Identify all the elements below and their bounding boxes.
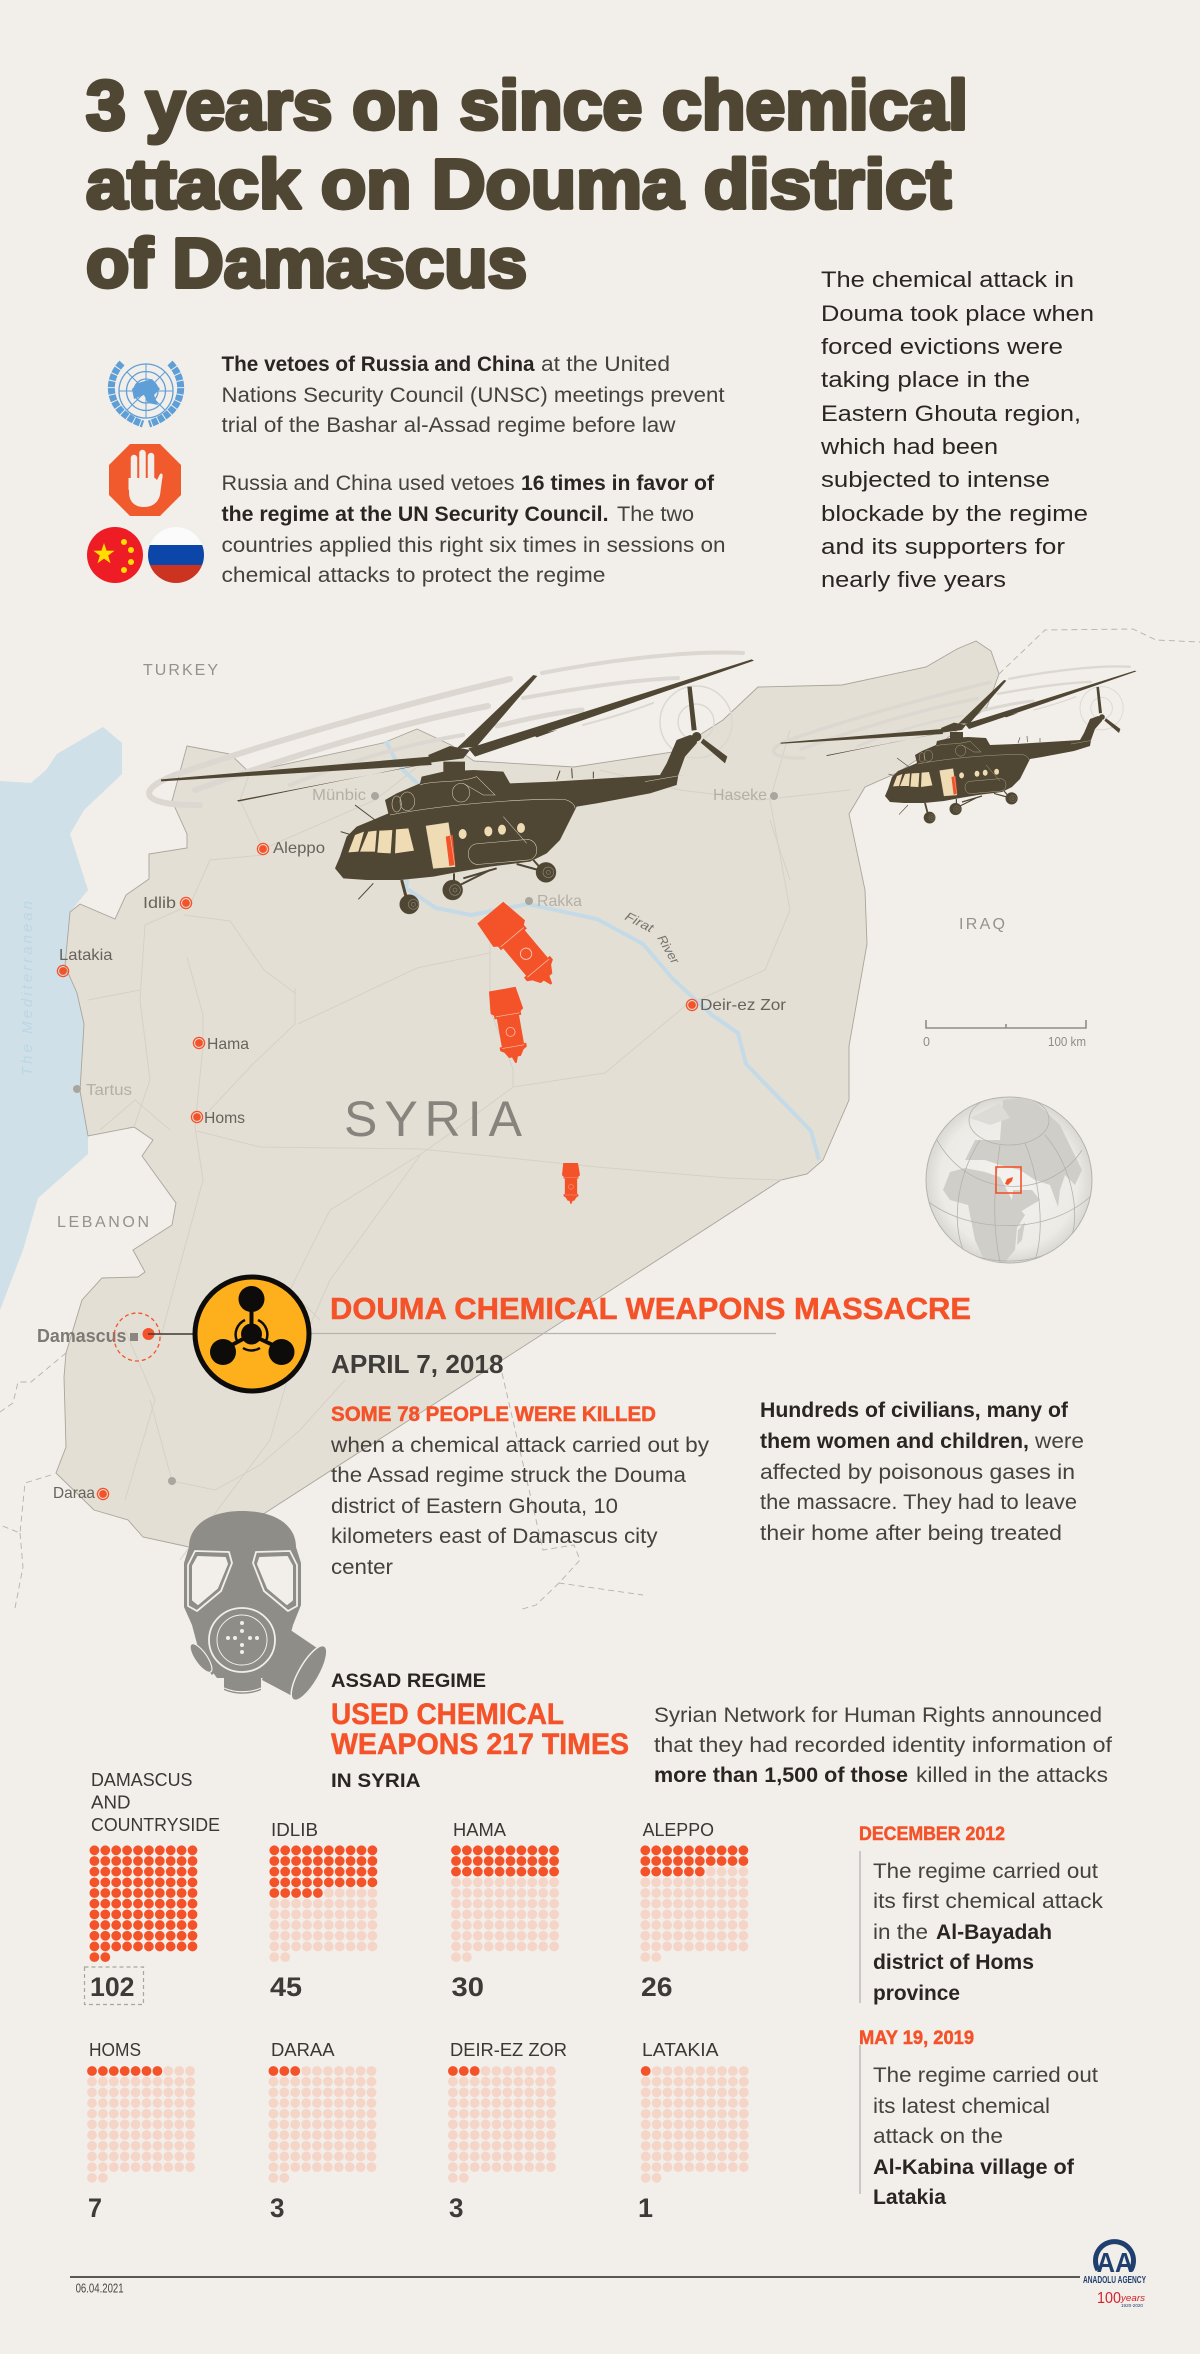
dot chart: Aleppo: ALEPPO: [643, 1819, 714, 1840]
city markers: Firat: [623, 909, 656, 936]
dot chart: Damascus and countryside: AND: [91, 1792, 130, 1812]
text block: civilians affected: them women and children,: [760, 1429, 1029, 1453]
dot chart: Deir-ez Zor: [449, 2039, 567, 2223]
title: [86, 66, 968, 302]
labels: neighbouring countries: TURKEY: [143, 662, 218, 679]
city markers: River: [654, 932, 682, 967]
logo: Anadolu Agency: 100: [1097, 2290, 1121, 2307]
text block: civilians affected: [760, 1398, 1084, 1545]
text block: veto counts: Russia and China used vetoes: [222, 472, 514, 495]
dot chart: Idlib: 45: [270, 1972, 302, 2002]
timeline: December 2012: in the: [873, 1921, 928, 1944]
text block: vetoes of Russia and China: at the United: [541, 353, 670, 376]
text block: Syrian Network for Human Rights: [654, 1704, 1112, 1787]
title: 3 years on since chemical: [86, 66, 968, 144]
text block: civilians affected: were: [1034, 1430, 1084, 1453]
text block: civilians affected: Hundreds of civilians, many of: [760, 1398, 1069, 1422]
icon: gas mask: [184, 1511, 333, 1705]
heading: Assad regime used chemical weapons 217 times: ASSAD REGIME: [331, 1671, 486, 1692]
text block: people killed: district of Eastern Ghouta, 10: [331, 1495, 618, 1518]
logo: Anadolu Agency: AA: [1096, 2247, 1134, 2278]
text block: civilians affected: affected by poisonous gases in: [760, 1461, 1075, 1484]
text block: veto counts: countries applied this right six times in sessions on: [222, 534, 726, 557]
icon: Russia flag: [148, 527, 204, 583]
divider under heading: [311, 1332, 776, 1334]
timeline: May 19, 2019: MAY 19, 2019: [859, 2028, 974, 2049]
text block: people killed: [330, 1403, 710, 1579]
dot chart: Damascus and countryside: DAMASCUS: [91, 1769, 192, 1790]
timeline: May 19, 2019: attack on the: [873, 2125, 1003, 2148]
city markers: Aleppo: [273, 840, 325, 857]
city markers: Homs: [204, 1110, 245, 1127]
Damascus marker: [37, 1313, 195, 1361]
date: April 7, 2018: APRIL 7, 2018: [331, 1349, 504, 1379]
text block: Syrian Network for Human Rights: that they had recorded identity information of: [654, 1734, 1112, 1757]
logo: Anadolu Agency: ANADOLU AGENCY: [1083, 2275, 1146, 2286]
text block: veto counts: 16 times in favor of: [521, 471, 715, 495]
labels: neighbouring countries: [19, 662, 1005, 1231]
dot chart: Daraa: [270, 2039, 372, 2223]
text block: veto counts: chemical attacks to protect the regime: [222, 564, 606, 587]
timeline: December 2012: province: [873, 1981, 960, 2005]
text block: vetoes of Russia and China: Nations Security Council (UNSC) meetings prevent: [222, 384, 725, 407]
river: Euphrates: [386, 741, 819, 1160]
timeline: May 19, 2019: Al-Kabina village of: [873, 2155, 1075, 2179]
dot chart: Damascus and countryside: COUNTRYSIDE: [91, 1814, 220, 1835]
city markers: Haseke: [713, 787, 767, 804]
dot chart: Latakia: [638, 2039, 744, 2223]
dot chart: Damascus and countryside: [84, 1769, 220, 2004]
text block: Syrian Network for Human Rights: more than 1,500 of those: [654, 1763, 908, 1787]
dot chart: Idlib: [270, 1819, 372, 2002]
text block: people killed: the Assad regime struck the Douma: [331, 1464, 686, 1487]
bomb: medium: [487, 986, 532, 1066]
scale bar: 0: [923, 1035, 930, 1049]
text block: Douma context: The chemical attack in: [821, 267, 1074, 292]
timeline: May 19, 2019: The regime carried out: [873, 2064, 1098, 2087]
text block: Douma context: subjected to intense: [821, 467, 1050, 492]
text block: Douma context: blockade by the regime: [821, 501, 1088, 526]
icon: United Nations emblem: [111, 363, 181, 424]
city markers: Tartus: [86, 1082, 132, 1099]
dot chart: Daraa: 3: [270, 2193, 284, 2223]
heading: Assad regime used chemical weapons 217 times: IN SYRIA: [331, 1771, 421, 1792]
dot chart: Deir-ez Zor: 3: [449, 2193, 464, 2223]
dot chart: Aleppo: [641, 1819, 744, 2002]
dot chart: Aleppo: 26: [641, 1972, 672, 2002]
dot chart: Idlib: IDLIB: [271, 1819, 318, 1840]
timeline: December 2012: [859, 1824, 1104, 2005]
timeline: December 2012: DECEMBER 2012: [859, 1824, 1005, 1845]
text block: people killed: kilometers east of Damascus city: [331, 1525, 658, 1548]
title: of Damascus: [86, 224, 527, 302]
city markers: Daraa: [53, 1485, 95, 1502]
text block: veto counts: the regime at the UN Security Council.: [222, 502, 608, 526]
roads: [88, 730, 850, 1560]
Damascus marker: Damascus: [37, 1326, 126, 1346]
logo: Anadolu Agency: 1920-2020: [1121, 2303, 1143, 2308]
labels: neighbouring countries: The Mediterranean: [19, 901, 36, 1076]
logo: Anadolu Agency: years: [1120, 2293, 1146, 2303]
timeline: May 19, 2019: [859, 2028, 1098, 2209]
heading: Assad regime used chemical weapons 217 times: WEAPONS 217 TIMES: [331, 1728, 629, 1761]
label: Syria: SYRIA: [344, 1091, 523, 1147]
dot chart: Homs: [88, 2039, 190, 2223]
icon: China flag: [87, 527, 143, 583]
text block: Douma context: forced evictions were: [821, 334, 1063, 359]
city markers: Hama: [207, 1036, 249, 1053]
dot chart: Homs: 7: [88, 2193, 102, 2223]
timeline: December 2012: district of Homs: [873, 1950, 1034, 1974]
text block: civilians affected: their home after being treated: [760, 1522, 1062, 1545]
map: Syria: [0, 629, 1200, 1610]
dot chart: Damascus and countryside: 102: [90, 1972, 134, 2002]
title: attack on Douma district: [86, 145, 951, 223]
dot chart: Hama: 30: [452, 1972, 484, 2002]
text block: Douma context: taking place in the: [821, 367, 1030, 392]
text block: vetoes of Russia and China: The vetoes of Russia and China: [222, 352, 535, 376]
sea: [0, 727, 122, 1310]
footer rule: [70, 2276, 1080, 2278]
city markers: Münbic: [312, 787, 366, 804]
heading: Assad regime used chemical weapons 217 times: [331, 1671, 629, 1792]
timeline: December 2012: Al-Bayadah: [936, 1920, 1052, 1944]
dot chart: Deir-ez Zor: DEIR-EZ ZOR: [450, 2039, 567, 2060]
text block: vetoes of Russia and China: [222, 352, 725, 437]
labels: neighbouring countries: IRAQ: [959, 916, 1005, 933]
date stamp: 06.04.2021: [76, 2282, 124, 2296]
text block: people killed: when a chemical attack carried out by: [330, 1434, 710, 1457]
city markers: Idlib: [143, 895, 176, 912]
text block: civilians affected: the massacre. They had to leave: [760, 1491, 1077, 1514]
text block: Douma context: nearly five years: [821, 567, 1006, 592]
text block: Douma context: which had been: [820, 434, 998, 459]
text block: vetoes of Russia and China: trial of the Bashar al-Assad regime before law: [222, 414, 676, 437]
text block: Syrian Network for Human Rights: killed in the attacks: [916, 1764, 1108, 1787]
bomb: large: [475, 899, 567, 997]
timeline: May 19, 2019: its latest chemical: [873, 2095, 1050, 2118]
city markers: Rakka: [537, 893, 582, 910]
text block: Douma context: [820, 267, 1094, 592]
city markers: Latakia: [59, 947, 113, 964]
heading: Douma chemical weapons massacre: DOUMA CHEMICAL WEAPONS MASSACRE: [330, 1291, 971, 1326]
borders: [0, 629, 1200, 1610]
timeline: December 2012: its first chemical attack: [873, 1890, 1104, 1913]
dot chart: Homs: HOMS: [89, 2039, 141, 2060]
heading: Assad regime used chemical weapons 217 times: USED CHEMICAL: [331, 1698, 564, 1731]
text block: veto counts: [222, 471, 726, 587]
globe locator: [926, 1095, 1092, 1263]
text block: Douma context: and its supporters for: [821, 534, 1066, 559]
icon: biohazard: [195, 1277, 309, 1391]
dot chart: Hama: [452, 1819, 554, 2002]
city markers: [53, 787, 787, 1502]
text block: people killed: center: [331, 1556, 393, 1579]
text block: Douma context: Eastern Ghouta region,: [821, 401, 1081, 426]
scale bar: 100 km: [1048, 1035, 1086, 1049]
scale bar: [923, 1020, 1086, 1049]
dot chart: Daraa: DARAA: [271, 2039, 335, 2060]
helicopter: large: [149, 652, 754, 914]
dot chart: Latakia: 1: [638, 2193, 653, 2223]
icon: stop hand: [109, 444, 181, 516]
timeline: December 2012: The regime carried out: [873, 1860, 1098, 1883]
city markers: Deir-ez Zor: [700, 997, 787, 1014]
timeline: May 19, 2019: Latakia: [873, 2185, 947, 2209]
text block: Douma context: Douma took place when: [821, 301, 1094, 326]
country outline: [56, 641, 999, 1547]
text block: Syrian Network for Human Rights: Syrian Network for Human Rights announced: [654, 1704, 1102, 1727]
logo: Anadolu Agency: [1083, 2242, 1146, 2308]
dot chart: Latakia: LATAKIA: [642, 2039, 719, 2060]
dot chart: Hama: HAMA: [453, 1819, 507, 1840]
text block: people killed: SOME 78 PEOPLE WERE KILLED: [331, 1403, 656, 1426]
helicopter: small: [773, 666, 1136, 823]
labels: neighbouring countries: LEBANON: [57, 1214, 149, 1231]
bomb: small: [562, 1163, 580, 1204]
text block: veto counts: The two: [617, 503, 694, 526]
